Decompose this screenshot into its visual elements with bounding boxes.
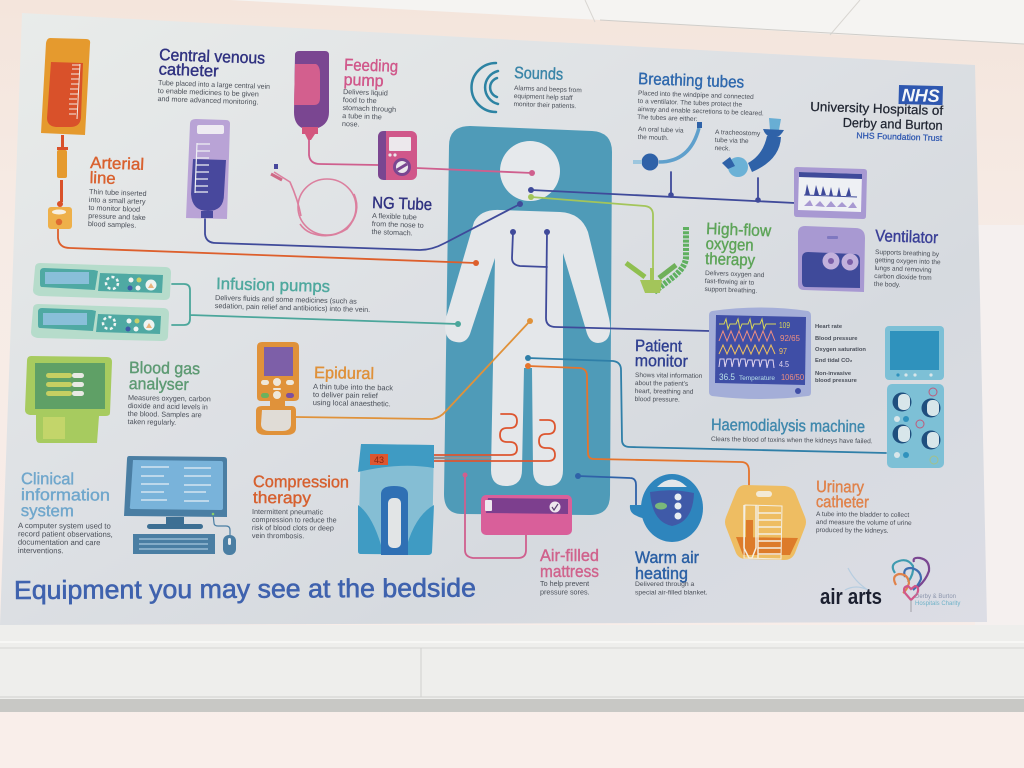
icon: high-flow oxygen nasal cannula: [626, 227, 686, 293]
heading: High-flow oxygen therapy: High-flow: [706, 220, 772, 240]
icon: computer: [124, 456, 236, 555]
icon: blood gas analyser: [25, 356, 112, 443]
text: infusion pumps description: sedation, pain relief and antibiotics) into the vein.: [215, 301, 370, 314]
icon: air-filled mattress pump: [481, 495, 572, 535]
icon: compression pump: [358, 444, 434, 555]
text: Arterial line description: pressure and take: [88, 211, 146, 222]
heading: High-flow oxygen therapy: oxygen: [705, 235, 754, 255]
text: urinary description: and measure the volume of urine: [816, 519, 912, 527]
trust name: [809, 99, 944, 143]
NHS badge: NHS: [901, 85, 940, 106]
text: blood gas description: [128, 393, 211, 427]
logo: air arts: [820, 568, 882, 609]
text: blood gas description: taken regularly.: [128, 417, 176, 427]
text: high-flow description: Delivers oxygen and: [705, 270, 765, 279]
text: warm air description: Delivered through a: [635, 581, 695, 588]
icon: oral breathing tube: [633, 122, 702, 170]
heading: Air-filled mattress: Air-filled: [540, 547, 599, 565]
heading: Feeding pump: [343, 56, 398, 91]
text: NG Tube description: A flexible tube: [372, 211, 417, 222]
logo: Derby and Burton Hospitals Charity: Derby & Burton: [915, 594, 956, 600]
connecting tubes: [58, 135, 886, 558]
text: Breathing tubes description: to a ventilator. The tubes protect the: [638, 98, 743, 109]
CO2 trace: [719, 359, 774, 368]
text: warm air description: special air-filled blanket.: [635, 590, 708, 596]
icon: infusion pumps: [31, 263, 171, 341]
text: Arterial line description: [88, 187, 147, 230]
text: tracheostomy tube label: tube via the: [715, 137, 749, 145]
icon: patient monitor: 106/50: [781, 372, 804, 382]
heading: Ventilator: Ventilator: [875, 227, 939, 247]
text: high-flow description: [704, 270, 765, 295]
text: Breathing tubes description: The tubes are either:: [637, 114, 698, 123]
heading: High-flow oxygen therapy: therapy: [705, 250, 756, 270]
text: Feeding pump description: stomach through: [342, 103, 396, 114]
heading: Infusion pumps: Infusion pumps: [216, 275, 330, 296]
icon: patient monitor: 92/65: [780, 333, 800, 343]
text: NG Tube description: the stomach.: [371, 227, 413, 237]
text: ventilator description: [874, 249, 941, 290]
text: Sounds description: monitor their patients.: [513, 101, 577, 110]
text: urinary description: A tube into the bladder to collect: [816, 511, 909, 519]
text: patient monitor description: heart, breathing and: [635, 388, 694, 396]
text: ventilator description: Supports breathing by: [875, 249, 940, 258]
heading: Feeding pump: pump: [343, 71, 384, 90]
heading: Warm air heating: [635, 549, 699, 583]
text: compression description: risk of blood clots or deep: [252, 523, 334, 532]
text: Sounds description: [513, 85, 582, 110]
legend: monitor readings: Oxygen saturation: [815, 347, 866, 353]
heading: Breathing tubes: Breathing tubes: [638, 70, 744, 92]
text: Epidural description: using local anaesthetic.: [313, 398, 391, 408]
heading: Central venous catheter: catheter: [158, 60, 219, 81]
heading: Sounds: Sounds: [514, 64, 563, 84]
text: clinical information description: [18, 521, 113, 556]
heading: Blood gas analyser: [129, 359, 200, 394]
text: Feeding pump description: a tube in the: [342, 111, 382, 121]
icon: warm air heating unit: [630, 474, 703, 542]
text: patient monitor description: blood pressure.: [635, 396, 680, 404]
legend: monitor readings: Non-invasive: [815, 371, 852, 377]
text: high-flow description: fast-flowing air to: [705, 278, 755, 287]
icon: ventilator screen: [794, 167, 867, 219]
heading: Clinical information system: Clinical: [21, 470, 74, 488]
heading: Haemodialysis machine: Haemodialysis machine: [711, 416, 865, 436]
text: infusion pumps description: Delivers fluids and some medicines (such as: [215, 293, 357, 306]
heading: Arterial line: line: [89, 169, 116, 188]
text: infusion pumps description: [215, 293, 371, 314]
heading: Urinary catheter: Urinary: [816, 478, 865, 497]
text: tracheostomy tube label: [714, 129, 761, 154]
heading: Patient monitor: [635, 337, 689, 371]
heading: Urinary catheter: catheter: [816, 493, 869, 512]
heading: Compression therapy: Compression: [253, 473, 349, 492]
icon: patient monitor: 109: [779, 320, 790, 330]
icon: urinary catheter bag: [725, 485, 806, 560]
ceiling: [230, 0, 1024, 44]
logo: NHS University Hospitals: [809, 85, 944, 143]
text: blood gas description: the blood. Samples are: [128, 409, 202, 419]
icon: sounds waves: [472, 63, 498, 112]
title: Equipment you may see at the bedside: [14, 573, 476, 605]
logo: Derby and Burton Hospitals Charity: [893, 558, 960, 612]
text: patient monitor description: Shows vital information: [635, 372, 703, 380]
wall shelf below poster: [0, 625, 1024, 712]
text: Feeding pump description: nose.: [342, 119, 360, 129]
icon: tracheostomy tube: [722, 118, 784, 177]
text: air-filled description: [540, 579, 590, 596]
icon: compression pump: 43: [374, 455, 384, 465]
legend: monitor readings: blood pressure: [815, 378, 858, 384]
head: [500, 141, 560, 201]
icon: patient monitor: 97: [779, 346, 787, 356]
logo: air arts: air arts: [820, 584, 882, 609]
icon: patient monitor: Temperature: [739, 376, 776, 382]
text: Sounds description: equipment help staff: [514, 93, 573, 102]
trust name: Derby and Burton: [842, 115, 943, 133]
text: ventilator description: the body.: [874, 281, 901, 289]
text: Central venous description: [157, 78, 270, 107]
text: compression description: vein thrombosis.: [252, 531, 304, 540]
heading: Warm air heating: Warm air: [635, 549, 699, 567]
heading: Arterial line: [89, 154, 144, 189]
text: clinical information description: documentation and care: [18, 538, 100, 547]
heading: Clinical information system: [21, 470, 110, 521]
text: Feeding pump description: Delivers liquid: [343, 87, 388, 98]
legend: monitor readings: [815, 324, 866, 384]
text: ventilator description: lungs and removing: [874, 265, 932, 274]
icon: arterial line bag: [41, 38, 90, 229]
right wall patch: [975, 225, 1024, 625]
text: oral tube label: the mouth.: [638, 134, 669, 142]
icon: ventilator unit: [798, 226, 865, 292]
text: urinary description: [816, 511, 912, 535]
text: NG Tube description: [371, 211, 424, 238]
trust name: University Hospitals of: [810, 99, 944, 118]
icon: central venous catheter bag: [186, 119, 230, 219]
text: oral tube label: [638, 126, 684, 143]
heading: Clinical information system: system: [21, 502, 74, 520]
text: air-filled description: To help prevent: [540, 579, 589, 588]
text: Epidural description: A thin tube into the back: [313, 382, 393, 392]
text: haemodialysis description: Clears the blood of toxins when the kidneys have failed.: [711, 436, 873, 445]
icon: NG tube coil: [271, 164, 357, 236]
text: NG Tube description: from the nose to: [372, 219, 424, 230]
text: patient monitor description: [635, 372, 703, 404]
oxygen trace: [719, 345, 775, 354]
heading: Clinical information system: information: [21, 486, 110, 505]
text: oral tube label: An oral tube via: [638, 126, 684, 135]
legend: monitor readings: Heart rate: [815, 324, 843, 330]
text: Arterial line description: into a small artery: [89, 195, 146, 206]
text: urinary description: produced by the kidneys.: [816, 527, 889, 535]
text: Arterial line description: blood samples.: [88, 219, 136, 230]
icon: patient monitor: [709, 308, 811, 399]
legend: monitor readings: Blood pressure: [815, 336, 858, 342]
text: clinical information description: record patient observations,: [18, 529, 113, 539]
text: Central venous description: and more advanced monitoring.: [157, 94, 259, 107]
heading: Blood gas analyser: analyser: [129, 375, 189, 394]
text: Breathing tubes description: airway and enable secretions to be cleared.: [637, 106, 764, 117]
text: compression description: Intermittent pneumatic: [252, 507, 324, 516]
icon: feeding pump unit: [378, 131, 417, 180]
icon: patient monitor: 36.5: [719, 372, 735, 382]
text: tracheostomy tube label: A tracheostomy: [715, 129, 761, 138]
heading: Epidural: Epidural: [314, 364, 374, 383]
text: Central venous description: Tube placed into a large central vein: [158, 78, 270, 91]
panel: bed: [444, 126, 612, 515]
heading: Central venous catheter: [158, 46, 265, 82]
text: air-filled description: pressure sores.: [540, 588, 590, 596]
heading: Blood gas analyser: Blood gas: [129, 359, 200, 378]
heading: Patient monitor: Patient: [635, 337, 683, 356]
text: clinical information description: A computer system used to: [18, 521, 111, 531]
text: blood gas description: dioxide and acid levels in: [128, 401, 208, 411]
pump 1: [33, 263, 171, 300]
text: ventilator description: getting oxygen into the: [875, 257, 941, 266]
text: Breathing tubes description: Placed into the windpipe and connected: [638, 90, 754, 101]
text: blood gas description: Measures oxygen, carbon: [128, 393, 211, 403]
text: Epidural description: [313, 382, 393, 408]
text: high-flow description: support breathing.: [704, 286, 758, 295]
text: ventilator description: carbon dioxide from: [874, 273, 932, 282]
heart rate trace: [719, 319, 776, 329]
heading: Arterial line: Arterial: [90, 154, 144, 174]
icon: feeding pump bottle: [294, 51, 329, 140]
body diagram: [444, 126, 612, 515]
trust name: NHS Foundation Trust: [856, 130, 943, 143]
blood pressure trace: [719, 331, 775, 341]
text: Arterial line description: to monitor blood: [88, 203, 140, 214]
heading: Central venous catheter: Central venous: [159, 46, 265, 68]
heading: High-flow oxygen therapy: [705, 220, 772, 270]
pump 2: [31, 304, 169, 341]
heading: Urinary catheter: [816, 478, 870, 512]
icon: epidural pump: [256, 342, 299, 435]
legend: monitor readings: End tidal CO₂: [815, 358, 853, 364]
text: warm air description: [635, 581, 708, 596]
heading: Compression therapy: [253, 473, 349, 508]
text: Breathing tubes description: [637, 90, 765, 125]
heading: Compression therapy: therapy: [253, 489, 312, 507]
text: Central venous description: to enable medicines to be given: [158, 86, 259, 99]
icon: patient monitor: 4.5: [779, 359, 789, 369]
heading: Warm air heating: heating: [635, 565, 688, 583]
text: compression description: [252, 507, 337, 540]
text: Sounds description: Alarms and beeps from: [514, 85, 582, 94]
heading: Air-filled mattress: [540, 547, 599, 581]
text: Arterial line description: Thin tube inserted: [89, 187, 147, 198]
poster board: [0, 13, 987, 625]
text: clinical information description: interventions.: [18, 546, 64, 555]
heading: NG Tube: NG Tube: [372, 194, 432, 214]
text: tracheostomy tube label: neck.: [714, 145, 730, 153]
logo: Derby and Burton Hospitals Charity: Hospitals Charity: [915, 601, 960, 607]
text: Feeding pump description: food to the: [343, 95, 377, 105]
text: Feeding pump description: [342, 87, 397, 130]
text: compression description: compression to reduce the: [252, 515, 337, 524]
text: Epidural description: to deliver pain relief: [313, 390, 379, 400]
text: patient monitor description: about the patient's: [635, 380, 689, 388]
heading: Air-filled mattress: mattress: [540, 563, 599, 581]
icon: haemodialysis machine: [885, 326, 944, 468]
heading: Feeding pump: Feeding: [344, 56, 398, 76]
heading: Patient monitor: monitor: [635, 352, 688, 371]
body silhouette: [445, 210, 610, 486]
